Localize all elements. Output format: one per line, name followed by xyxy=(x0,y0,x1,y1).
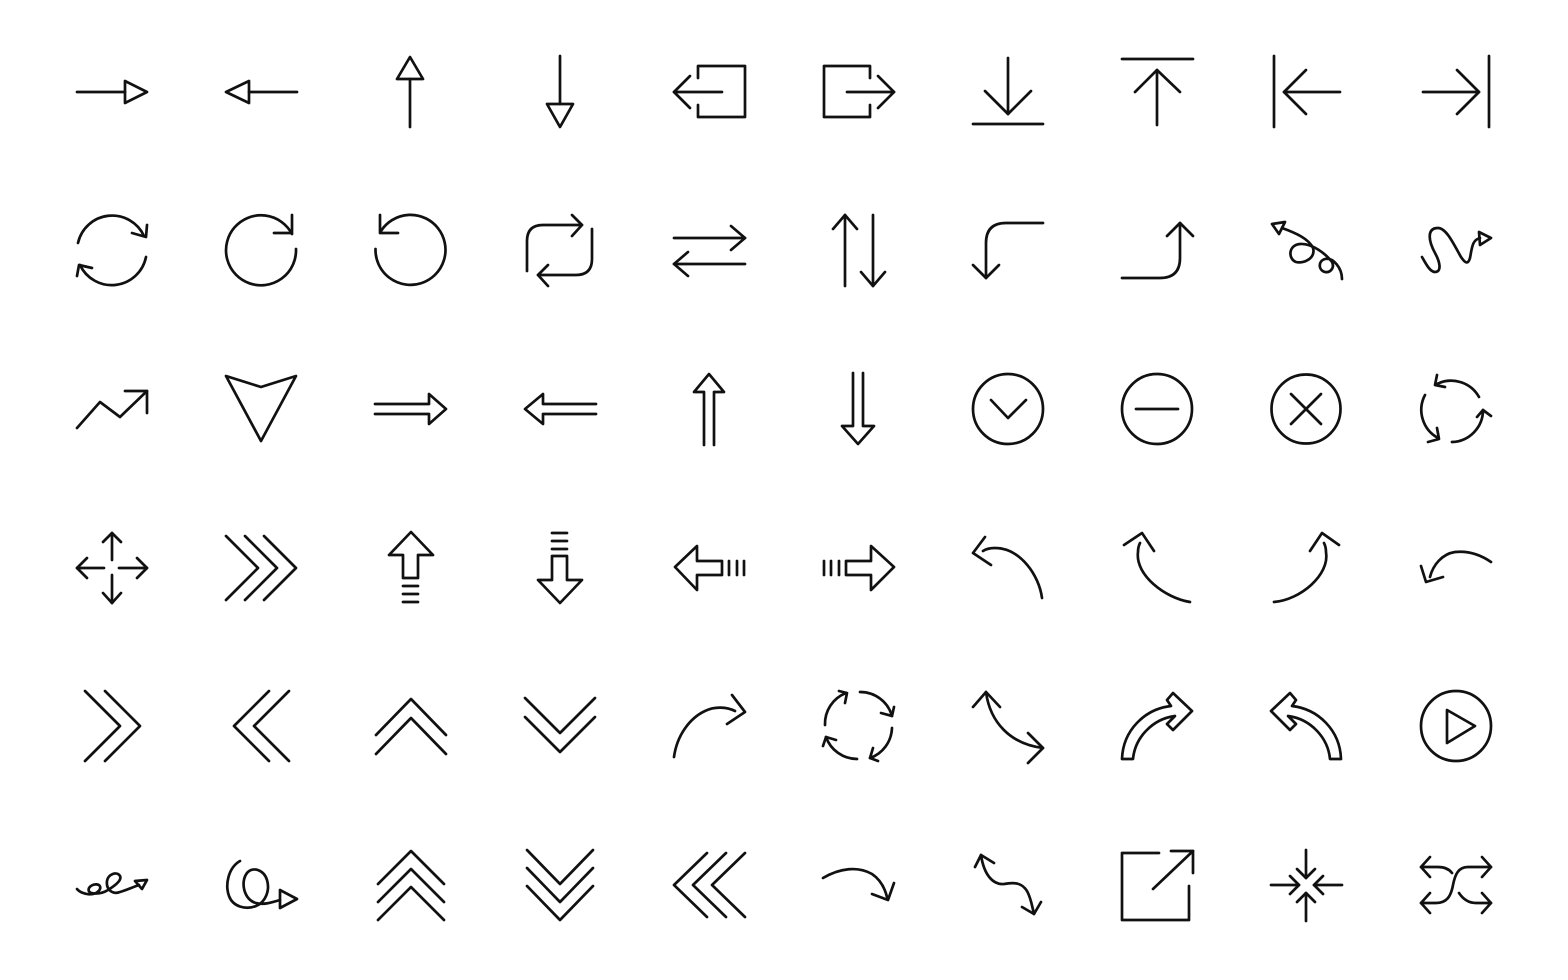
icon: double chevron up xyxy=(376,699,446,754)
icon: repeat loop xyxy=(527,215,592,286)
icon: double chevron down xyxy=(525,698,595,752)
icon: triple chevron down xyxy=(527,850,593,920)
icon: double line up arrow xyxy=(694,374,724,445)
icon: triple chevron right xyxy=(226,536,296,600)
icon: navigation pointer down xyxy=(226,376,296,441)
icon: rotate counter-clockwise xyxy=(375,215,445,285)
icon: block left arrow with dashes xyxy=(675,546,744,590)
icon: rotate clockwise xyxy=(226,215,296,285)
icon: four way move xyxy=(77,533,147,603)
icon: down arrow triangle xyxy=(547,56,573,127)
icon: squiggle small right xyxy=(77,874,147,894)
icon: double line left arrow xyxy=(525,394,596,424)
icon: three arrow cycle xyxy=(1421,375,1491,442)
icon: shuffle xyxy=(1421,857,1491,913)
icon: triple chevron left xyxy=(674,853,745,917)
icon: right arrow triangle xyxy=(77,81,147,103)
icon: arrow to left bar xyxy=(1274,56,1340,127)
icon: horizontal exchange xyxy=(674,226,745,276)
icon: refresh two arrows xyxy=(77,216,147,285)
icon: circle cross xyxy=(1272,374,1340,444)
icon: block curved arrow left xyxy=(1271,693,1341,759)
icon: trending up xyxy=(77,391,147,428)
icon: double line down arrow xyxy=(842,373,874,444)
icon: double chevron right xyxy=(85,691,140,761)
icon: squiggle arrow right xyxy=(1422,228,1491,272)
icon: curved two-way arrow xyxy=(973,692,1043,763)
icon: collapse inward xyxy=(1271,850,1342,921)
icon: wavy two-way arrow xyxy=(975,855,1041,914)
icon: squiggle arrow up left xyxy=(1272,222,1342,279)
icon: double chevron left xyxy=(234,691,289,761)
icon: download to line xyxy=(973,58,1043,124)
icon: curved arrow right xyxy=(674,695,745,757)
icon: curved arrow up left xyxy=(973,537,1042,598)
icon: block down arrow with dashes xyxy=(538,533,582,603)
icon: circle chevron down xyxy=(973,374,1043,444)
icon: upload to line xyxy=(1122,59,1193,125)
icon: shallow curved arrow left xyxy=(1421,552,1491,582)
icon: arrow to right bar xyxy=(1423,56,1489,127)
icon: circle minus xyxy=(1122,374,1192,444)
icon: double line right arrow xyxy=(375,394,446,424)
icon: shallow curved arrow right xyxy=(823,869,894,900)
icon: up arrow triangle xyxy=(397,57,423,127)
icon: curved arrow up from right xyxy=(1124,533,1190,602)
icon: circle play xyxy=(1421,691,1491,761)
icon: external link xyxy=(1122,851,1193,920)
icon: block up arrow with dashes xyxy=(389,532,433,602)
icon: login left xyxy=(674,66,745,117)
icon: triple chevron up xyxy=(378,851,444,920)
icon: block right arrow with dashes xyxy=(824,546,894,590)
icon: curved arrow up from left xyxy=(1274,533,1339,602)
icon: curved turn up xyxy=(1122,223,1193,278)
icon: four arrow cycle xyxy=(823,691,894,761)
icon: block curved arrow right xyxy=(1122,693,1192,759)
icon: curved turn down xyxy=(973,223,1043,278)
icon: loop arrow right xyxy=(227,861,297,908)
icon: logout right xyxy=(824,66,894,117)
icon: left arrow triangle xyxy=(226,81,297,103)
icon: vertical exchange xyxy=(833,215,885,286)
